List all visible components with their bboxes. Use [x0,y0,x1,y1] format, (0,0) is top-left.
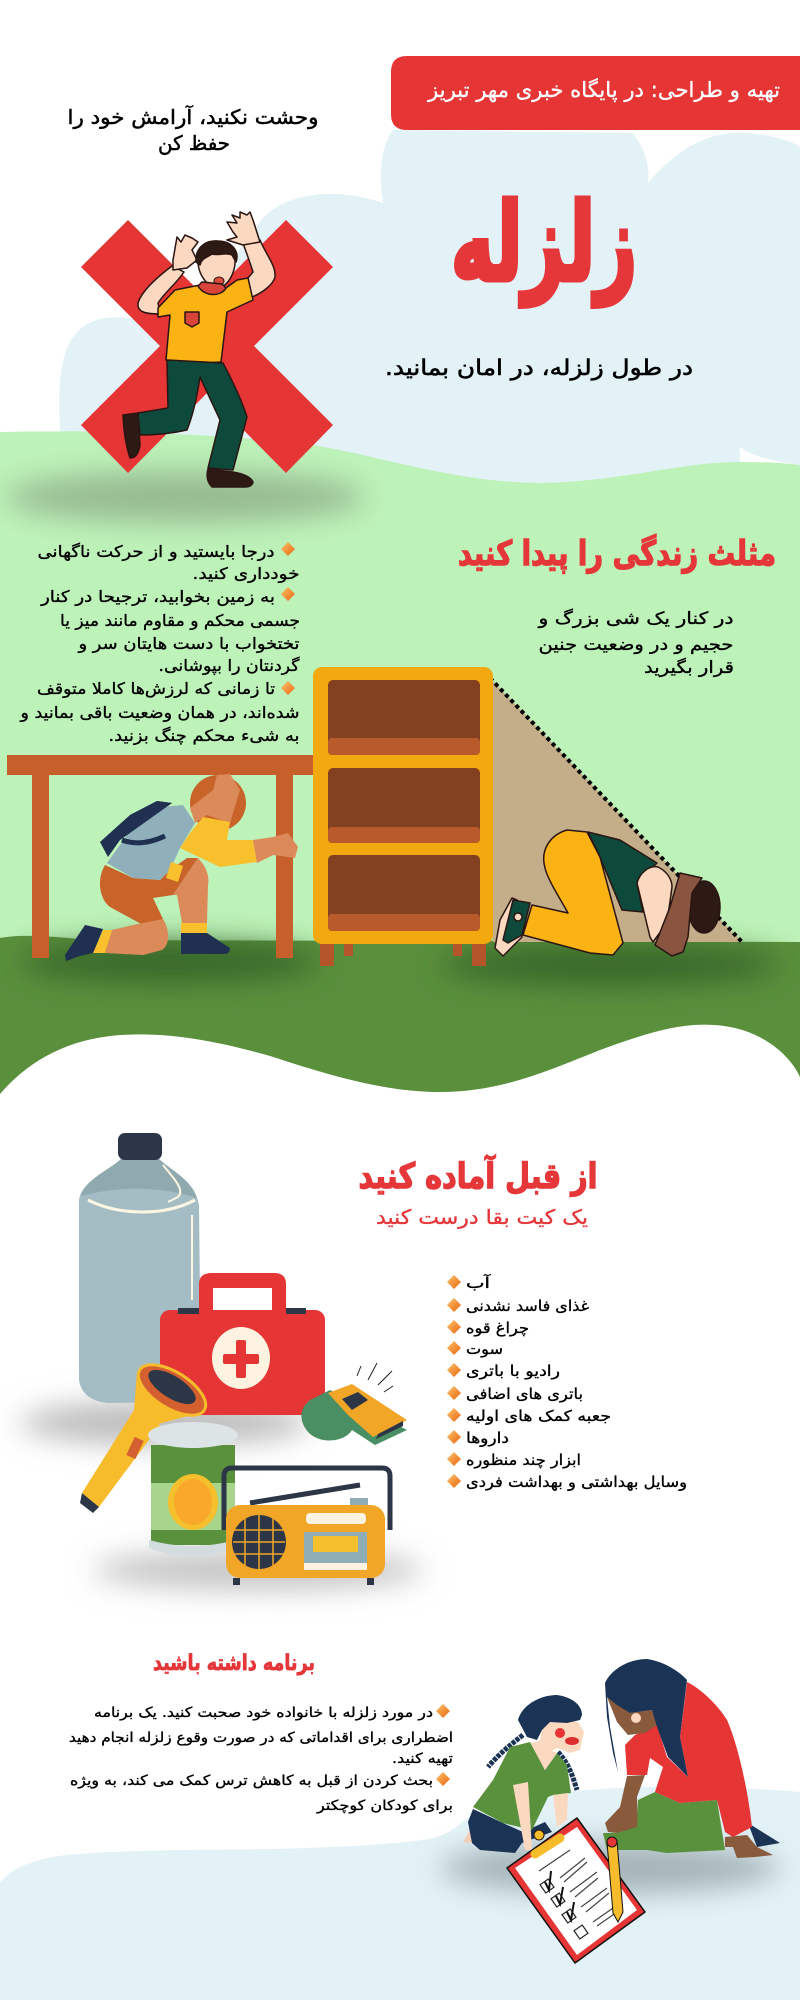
text: plan description [69,1704,453,1814]
heading: prepare: از قبل آماده کنید [358,1154,598,1197]
illustration: cabinet [313,667,493,966]
text: plan description: اضطراری برای اقداماتی که در صورت وقوع زلزله انجام دهید [69,1730,453,1746]
text: plan description: تهیه کنید. [392,1751,453,1767]
heading: have a plan: برنامه داشته باشید [153,1651,315,1676]
text: triangle of life description: قرار بگیرید [644,657,734,678]
icon: checked boxes [540,1871,588,1939]
text: plan description: بحث کردن از قبل به کاهش ترس کمک می کند، به ویژه [70,1773,433,1789]
flashlight [80,1355,214,1513]
text: what to do list [19,542,300,746]
list: survival kit items: ابزار چند منظوره [466,1451,581,1469]
illustration: bottle, first-aid kit and survival items [20,1133,423,1590]
shadow: family [440,1842,780,1894]
text: do not panic: حفظ کن [158,131,230,155]
text: do not panic [68,104,318,155]
illustration: mother [603,1659,780,1858]
banner: تهیه و طراحی: در پایگاه خبری مهر تبریز [427,78,780,102]
list: survival kit items: غذای فاسد نشدنی [466,1297,589,1315]
banner [391,56,800,130]
text: triangle of life description: حجیم و در وضعیت جنین [538,635,734,655]
text: what to do list: گردنتان را بپوشانی. [158,656,300,676]
first-aid kit [160,1273,325,1415]
text: plan description: برای کودکان کوچکتر [316,1798,453,1814]
illustration: panicking man [123,212,275,487]
list: survival kit items: جعبه کمک های اولیه [466,1407,611,1425]
illustration: table [7,755,321,958]
subtitle: در طول زلزله، در امان بمانید. [385,356,693,381]
list: survival kit items: داروها [466,1429,509,1447]
pencil [607,1837,623,1922]
text: triangle of life description: در کنار یک شی بزرگ و [537,608,734,629]
list: survival kit items: باتری های اضافی [466,1385,583,1403]
shadow: crouching person [440,945,780,985]
subheading: survival kit: یک کیت بقا درست کنید [376,1205,588,1229]
text: what to do list: تا زمانی که لرزش‌ها کاملا متوقف [37,679,275,699]
food can [148,1422,238,1556]
illustration: child [463,1695,584,1853]
text: what to do list: تختخواب با دست هایتان سر و [77,634,300,654]
background cloud: top [59,130,800,520]
title: زلزله [451,181,637,307]
illustration: person in fetal position [495,830,720,956]
list: survival kit items: سوت [466,1340,503,1358]
text: what to do list: درجا بایستید و از حرکت ناگهانی [38,542,274,562]
dark green ground [0,936,800,1094]
text: what to do list: به زمین بخوابید، ترجیحا در کنار [40,587,275,607]
list: survival kit items: وسایل بهداشتی و بهداشت فردی [466,1473,687,1491]
illustration: triangle of life [490,678,742,942]
shadow: kit [20,1401,310,1445]
illustration: person kneeling under table [65,774,298,961]
text: triangle of life description [537,608,734,678]
text: what to do list: جسمی محکم و مقاوم مانند میز یا [60,611,300,631]
whistle [301,1363,407,1445]
illustration: clipboard [507,1818,645,1963]
white notch [740,447,800,470]
text: what to do list: خودداری کنید. [192,564,300,584]
light green hill [0,431,800,960]
shadow: panicking man [5,471,365,523]
list: survival kit items: چراغ قوه [466,1319,529,1337]
shadow: radio [93,1550,423,1590]
list: survival kit items [447,1274,687,1491]
list: survival kit items: رادیو با باتری [466,1362,560,1380]
text: what to do list: شده‌اند، در همان وضعیت باقی بمانید و [19,703,300,723]
text: plan description: در مورد زلزله با خانواده خود صحبت کنید. یک برنامه [94,1705,433,1721]
bottom cloud [0,1787,800,2000]
text: do not panic: وحشت نکنید، آرامش خود را [68,104,318,129]
text: what to do list: به شیء محکم چنگ بزنید. [108,726,300,746]
shadow: under table [20,942,320,982]
list: survival kit items: آب [466,1274,491,1292]
bottle [79,1133,201,1403]
icon: red X [81,220,333,473]
radio [224,1468,390,1585]
